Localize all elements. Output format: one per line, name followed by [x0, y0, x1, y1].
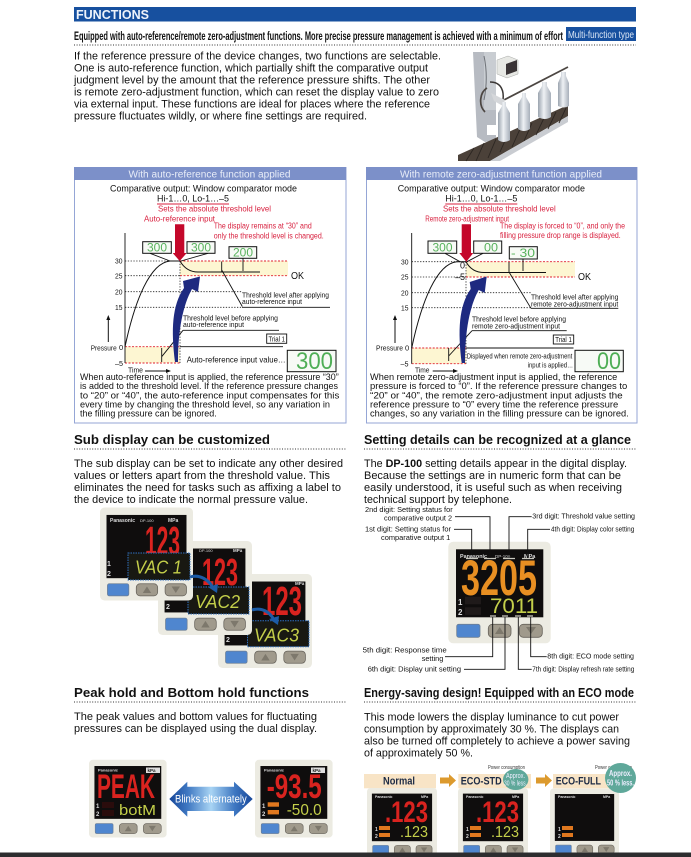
device: PEAK / botM: Panasonic	[98, 768, 119, 772]
device 2: VAC2	[195, 592, 240, 612]
ECO comparison: Normal: 1	[375, 827, 378, 833]
panel explanation text: is added to the threshold level. If the reference pressure changes	[80, 381, 338, 392]
text: Energy-saving	[364, 712, 630, 760]
callout labels: 2nd digit: Setting status for	[365, 505, 453, 514]
device 1: DP-100	[140, 518, 154, 523]
text: Energy-saving: of approximately 50 %.	[364, 748, 473, 760]
device: setting digits with callouts	[363, 505, 635, 674]
input value readout: Displayed when remote zero-adjustment	[467, 351, 573, 360]
device 1: MPa	[168, 518, 178, 524]
device: -93.5 / -50.0: 1	[262, 804, 266, 810]
text: Energy-saving: consumption by approximately 30 %. The displays can	[364, 724, 619, 736]
arrow: blinks alternately: Blinks alternately	[175, 794, 247, 806]
ECO comparison: Normal: .123	[400, 824, 428, 841]
mode text: Hi-1…0, Lo-1…–5	[157, 194, 229, 205]
readout displays: 200	[233, 248, 253, 260]
panel explanation text: When remote zero-adjustment input is applied, the reference	[370, 372, 617, 383]
device 1	[100, 508, 193, 600]
arrow: blue curved shift	[173, 276, 200, 362]
text: Setting details: Because the settings are in numeric form that can be	[364, 470, 621, 482]
section header bar: FUNCTIONS	[74, 7, 636, 22]
panel explanation text	[370, 372, 629, 420]
device: -93.5 / -50.0: -93.5	[267, 768, 322, 806]
panel title bar	[74, 167, 346, 181]
device: setting digits with callouts: DP-100	[495, 554, 511, 559]
callout labels: 6th digit: Display unit setting	[368, 665, 461, 674]
red annotations	[144, 215, 324, 240]
device: setting digits with callouts: 1	[458, 598, 463, 607]
heading: Peak hold: Peak hold and Bottom hold functions	[74, 685, 309, 700]
intro paragraph: One is auto-reference function, which partially shift the comparative output	[74, 62, 428, 74]
threshold chart: OK	[291, 271, 304, 282]
threshold chart: 0	[405, 344, 409, 353]
subheading with badge: Multi-function type	[568, 30, 634, 41]
mode text: Hi-1…0, Lo-1…–5	[445, 194, 517, 205]
threshold chart: Threshold level after applying	[531, 295, 618, 302]
text: Energy-saving: This mode lowers the display luminance to cut power	[364, 712, 619, 724]
input value readout: input is applied…	[528, 361, 573, 370]
ECO comparison: ECO-STD: .123	[491, 824, 519, 841]
threshold chart: Pressure	[91, 343, 117, 352]
threshold chart: –5	[115, 359, 123, 368]
text: Sub display	[74, 458, 343, 506]
readout displays	[143, 242, 257, 260]
panel title bar: With remote zero-adjustment function applied	[400, 170, 602, 181]
trial label	[553, 335, 574, 344]
device 3: 2	[226, 637, 230, 644]
readout displays: 300	[147, 243, 167, 255]
threshold chart: 0	[119, 343, 123, 352]
heading: Sub display: Sub display can be customized	[74, 432, 270, 447]
text: Setting details	[364, 458, 627, 506]
threshold chart: 15	[401, 303, 408, 312]
threshold chart: –5	[400, 360, 408, 368]
threshold chart: 20	[115, 287, 122, 296]
threshold chart: 15	[115, 303, 122, 312]
red annotations: Remote zero-adjustment input	[425, 214, 510, 224]
device 2	[158, 541, 252, 635]
text: Sub display: eliminates the need for tasks such as affixing a label to	[74, 482, 341, 494]
readout displays: - 30	[511, 248, 535, 260]
panel explanation text: the filling pressure can be ignored.	[80, 409, 217, 420]
device: -93.5 / -50.0: Panasonic	[264, 768, 285, 772]
device: PEAK / botM: PEAK	[97, 768, 155, 806]
ECO comparison: ECO-STD: 30 % less.	[504, 780, 527, 788]
trial label	[267, 334, 287, 343]
threshold chart	[376, 233, 618, 374]
callout labels: comparative output 2	[384, 514, 452, 523]
input value readout	[187, 348, 336, 375]
panel: auto-reference function	[74, 167, 346, 423]
device: PEAK / botM: kPa	[148, 768, 156, 773]
device: -93.5 / -50.0: 2	[262, 812, 266, 818]
device: PEAK / botM: 1	[96, 804, 100, 810]
device 1: 2	[107, 571, 111, 578]
ECO comparison: ECO-FULL: Panasonic	[558, 795, 576, 799]
callout labels: 8th digit: ECO mode setting	[547, 652, 634, 661]
intro paragraph: judgment level by the amount that the reference pressure shifts. The other	[73, 74, 430, 86]
callout labels: 5th digit: Response time	[363, 646, 447, 655]
threshold chart: Time	[128, 366, 143, 374]
mode text: Sets the absolute threshold level	[443, 204, 556, 214]
readout displays: 00	[484, 242, 498, 254]
input value readout: 300	[296, 348, 333, 375]
panel explanation text	[80, 372, 340, 420]
arrows: sequence	[190, 576, 279, 625]
bottom dark strip	[0, 852, 691, 857]
threshold chart: 20	[401, 288, 408, 297]
arrow: red input	[173, 224, 187, 261]
callout labels: 7th digit: Display refresh rate setting	[532, 665, 634, 674]
red annotations: filling pressure drop range is displayed.	[500, 231, 621, 240]
intro paragraph: is remote zero-adjustment function, which can reset the display value to zero	[74, 86, 439, 98]
threshold chart: remote zero-adjustment input	[472, 323, 560, 330]
threshold chart: 25	[115, 271, 122, 280]
threshold chart: Threshold level after applying	[242, 293, 329, 300]
panel title bar: With auto-reference function applied	[128, 170, 290, 181]
text: Energy-saving: also be turned off completely to achieve a power saving	[364, 736, 630, 748]
heading: Energy-saving: Energy-saving design! Equipped with an ECO mode	[364, 685, 634, 700]
threshold chart: auto-reference input	[183, 322, 244, 329]
device: PEAK / botM	[89, 760, 167, 838]
panel explanation text: pressure is forced to “0”. If the reference pressure changes to	[370, 381, 627, 392]
ECO comparison: Normal	[364, 774, 437, 857]
readout displays: 300	[191, 243, 211, 255]
callout labels: 1st digit: Setting status for	[365, 525, 451, 534]
ECO comparison: ECO-FULL: 50 % less.	[607, 778, 634, 788]
arrow: blinks alternately	[169, 782, 253, 817]
text: Peak hold: The peak values and bottom values for fluctuating	[74, 711, 317, 723]
ECO comparison: Normal: .123	[385, 796, 428, 829]
red annotations: only the threshold level is changed.	[214, 231, 324, 240]
device: setting digits with callouts: 7011	[490, 595, 538, 618]
panel explanation text: reference pressure to “0” every time the reference pressure	[370, 399, 618, 410]
text: Sub display: The sub display can be set to indicate any other desired	[74, 458, 343, 470]
callout labels: comparative output 1	[381, 533, 450, 542]
device 1: VAC 1	[135, 558, 182, 578]
text: Sub display: the device to indicate the normal pressure value.	[74, 494, 308, 506]
device 3: 123	[262, 578, 302, 624]
ECO comparison: ECO-FULL: ECO-FULL	[556, 776, 601, 788]
text: Setting details: easily understood, it is useful such as when receiving	[364, 482, 622, 494]
threshold chart: Threshold level before applying	[183, 316, 278, 323]
panel explanation text: to “20” or “40”, the auto-reference input compensates for this	[80, 390, 340, 401]
device: PEAK / botM: 2	[96, 812, 100, 818]
device: setting digits with callouts: 2	[458, 608, 463, 617]
ECO comparison: ECO-FULL: Power consumption	[595, 765, 632, 771]
ECO comparison: ECO-STD: 1	[466, 827, 469, 833]
ECO comparison: ECO-STD: .123	[476, 796, 519, 829]
threshold chart: auto-reference input	[242, 299, 302, 306]
arrow: red input	[459, 224, 473, 262]
device: PEAK / botM: botM	[119, 802, 156, 819]
ECO comparison: ECO-FULL	[550, 763, 636, 857]
mode text	[110, 184, 297, 214]
red annotations	[425, 214, 625, 240]
device 1: 123	[145, 518, 180, 564]
intro paragraph: pressure fluctuates wildly, or where fine settings are required.	[74, 110, 367, 122]
text: Peak hold	[74, 711, 317, 735]
text: Setting details: technical support by telephone.	[364, 494, 512, 506]
subheading with badge	[74, 27, 636, 45]
device 2: DP-100	[199, 548, 213, 553]
ECO comparison: ECO-STD: Approx.	[506, 773, 525, 780]
device 3	[218, 574, 312, 668]
devices: VAC sub-display sequence	[100, 508, 312, 668]
mode text: Comparative output: Window comparator mode	[110, 184, 297, 195]
heading: Setting details: Setting details can be recognized at a glance	[364, 432, 631, 447]
threshold chart: OK	[578, 272, 591, 283]
threshold chart: 0	[460, 260, 465, 270]
device: setting digits with callouts: MPa	[524, 554, 536, 560]
threshold chart: –5	[455, 272, 465, 282]
red annotations: The display remains at “30” and	[214, 221, 312, 230]
device 1: Panasonic	[110, 518, 135, 524]
mode text: Sets the absolute threshold level	[158, 204, 271, 214]
ECO comparison: ECO-FULL: MPa	[603, 795, 610, 799]
panel explanation text: every time by changing the threshold level, so any variation in	[80, 399, 330, 410]
ECO comparison: ECO-STD: Panasonic	[466, 795, 484, 799]
intro paragraph	[73, 50, 441, 122]
device 2: 123	[202, 552, 238, 594]
device 3: VAC3	[254, 626, 299, 646]
ECO comparison: ECO-FULL: 2	[558, 834, 561, 840]
input value readout: 00	[597, 348, 621, 375]
callout labels	[363, 505, 635, 674]
illustration: bottles on conveyor with sensor	[458, 52, 569, 161]
arrow: blue curved shift	[460, 276, 487, 363]
ECO comparison: Normal: Normal	[383, 776, 415, 788]
threshold chart: Pressure	[376, 344, 403, 353]
red annotations: Auto-reference input	[144, 215, 216, 224]
ECO comparison: ECO-STD: MPa	[512, 795, 519, 799]
panel explanation text: changes, so any variation in the filling pressure can be ignored.	[370, 409, 629, 420]
threshold chart: Time	[415, 366, 430, 374]
arrow: to ECO-STD	[440, 774, 456, 787]
ECO comparison: ECO-FULL: 1	[558, 827, 561, 833]
input value readout	[467, 348, 623, 375]
device: setting digits with callouts: Panasonic	[460, 554, 487, 560]
threshold chart: remote zero-adjustment input	[531, 302, 618, 309]
device 1: 1	[107, 561, 111, 568]
device 3: MPa	[295, 581, 305, 586]
device: -93.5 / -50.0: kPa	[312, 768, 321, 773]
callout labels: setting	[422, 654, 443, 663]
threshold chart: 30	[115, 257, 122, 266]
ECO comparison: Normal: 2	[375, 834, 378, 840]
device: -93.5 / -50.0	[255, 760, 333, 838]
readout displays	[428, 241, 537, 260]
intro paragraph: If the reference pressure of the device changes, two functions are selectable.	[74, 50, 441, 62]
text: Setting details: The DP-100 setting details appear in the digital display.	[364, 458, 627, 470]
threshold chart: 25	[401, 273, 408, 282]
ECO comparison: ECO-STD: ECO-STD	[461, 776, 502, 788]
ECO comparison: ECO-STD	[458, 765, 531, 857]
callout labels: 3rd digit: Threshold value setting	[532, 512, 635, 521]
device 3: DP-100	[225, 581, 239, 586]
panel explanation text: When auto-reference input is applied, the reference pressure “30”	[80, 372, 339, 383]
callout labels: 4th digit: Display color setting	[551, 525, 634, 534]
device 2: 2	[166, 604, 170, 611]
readout displays: 300	[432, 242, 452, 254]
trial label: Trial 1	[268, 336, 285, 343]
ECO comparison: Normal: MPa	[421, 795, 428, 799]
threshold chart: Threshold level before applying	[472, 317, 566, 324]
ECO comparison: ECO-STD: 2	[466, 834, 469, 840]
text: Peak hold: pressures can be displayed using the dual display.	[74, 723, 317, 735]
arrow: to ECO-FULL	[536, 774, 552, 787]
panel title bar	[366, 167, 637, 181]
panel: remote zero-adjustment function	[366, 167, 637, 423]
text: Sub display: values or letters apart from the threshold value. This	[74, 470, 330, 482]
device: -93.5 / -50.0: -50.0	[287, 802, 322, 819]
callout lines	[445, 517, 550, 669]
section header bar: FUNCTIONS: FUNCTIONS	[76, 7, 149, 22]
intro paragraph: via external input. These functions are ideal for places where the reference	[74, 98, 430, 110]
threshold chart	[91, 233, 330, 374]
panel explanation text: “20” or “40”, the remote zero-adjustment input adjusts the	[370, 390, 623, 401]
device 2: MPa	[233, 548, 243, 553]
mode text: Comparative output: Window comparator mode	[398, 184, 585, 195]
ECO comparison: ECO-FULL: Approx.	[609, 768, 632, 778]
input value readout: Auto-reference input value…	[187, 354, 286, 364]
trial label: Trial 1	[555, 337, 572, 344]
mode text	[398, 184, 585, 214]
device: setting digits with callouts: 3205	[461, 550, 537, 606]
ECO comparison: Normal: Panasonic	[375, 795, 393, 799]
threshold chart: 30	[401, 257, 408, 266]
red annotations: The display is forced to “0”, and only the	[500, 221, 625, 230]
ECO comparison: ECO-STD: Power consumption	[488, 765, 525, 771]
